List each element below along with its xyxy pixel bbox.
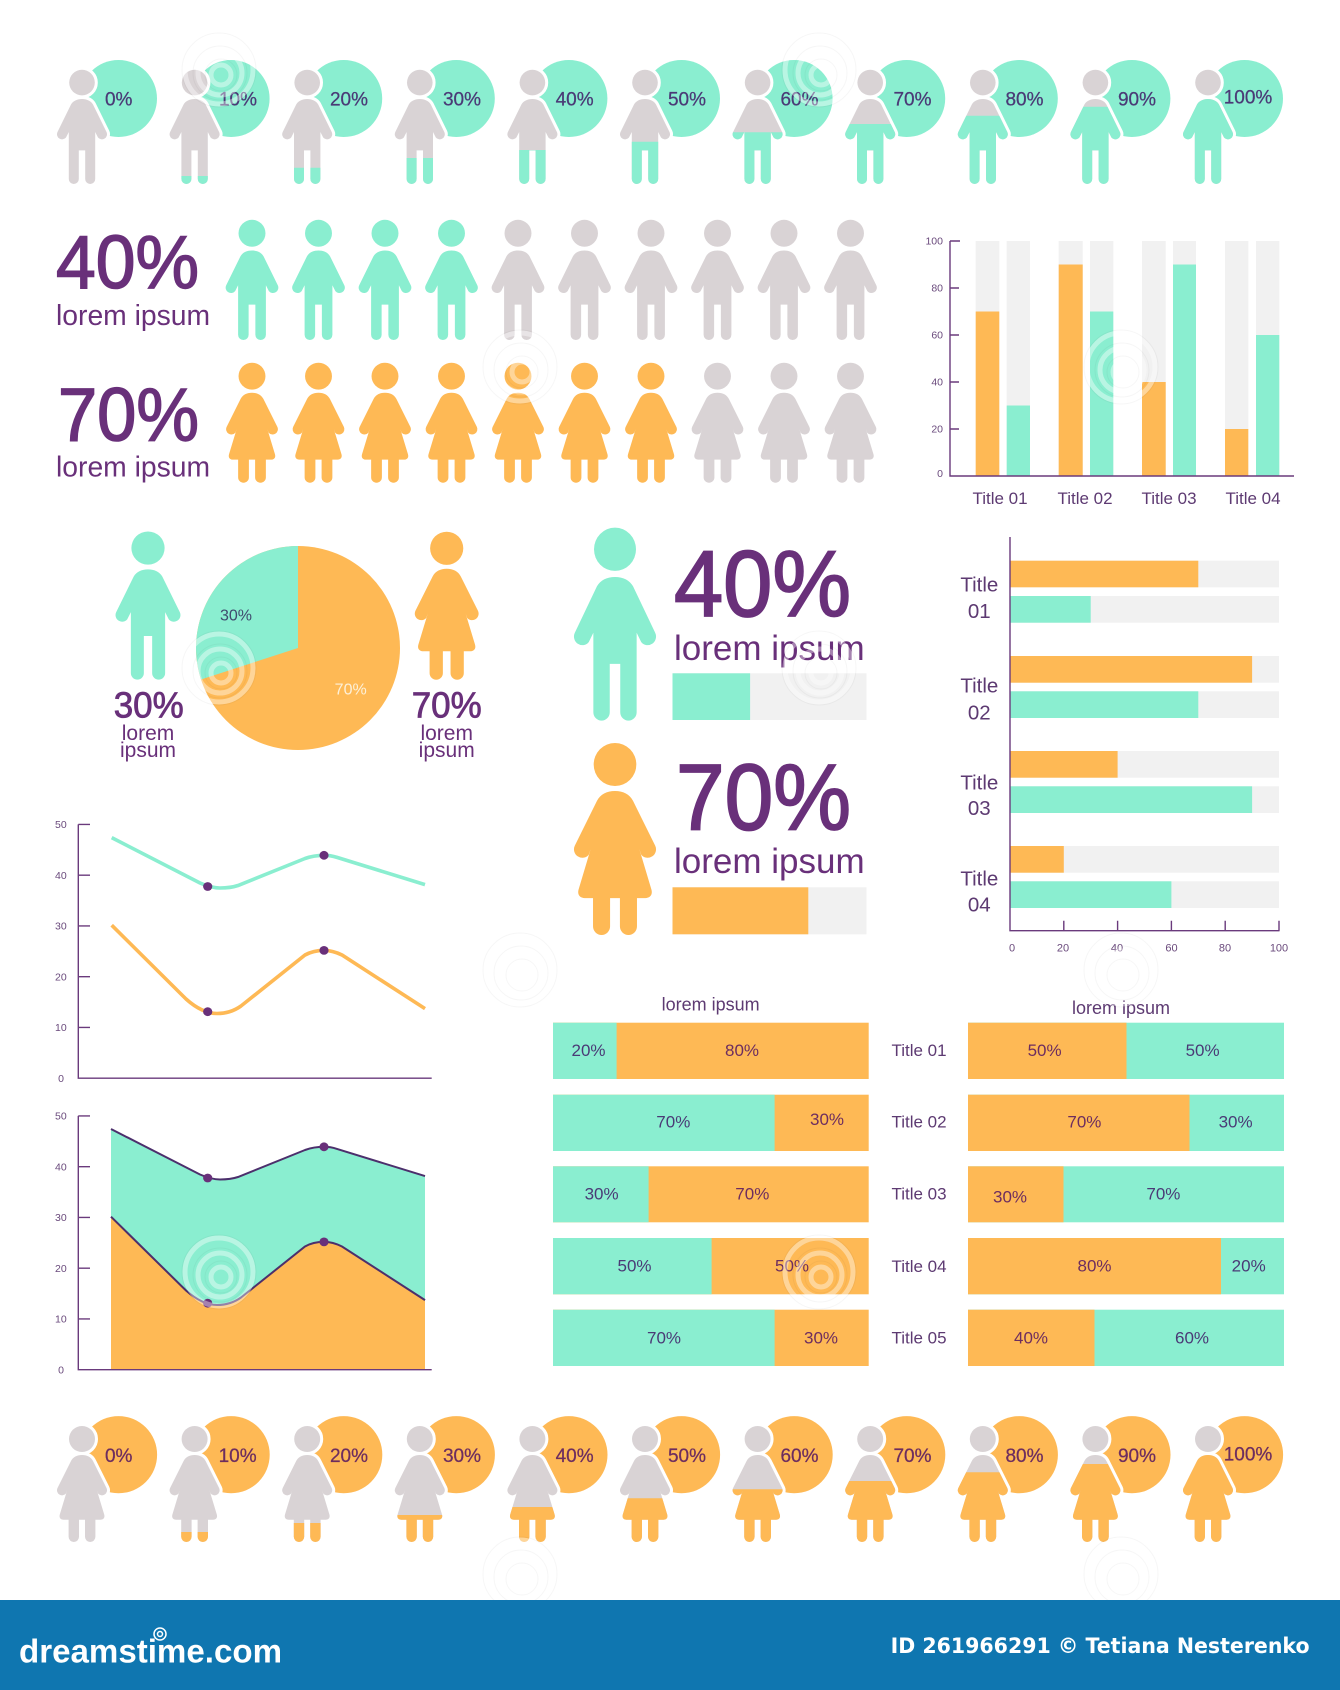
chart: area chart: 40	[55, 1162, 67, 1174]
icon: man 30%: 30%	[443, 89, 481, 110]
stacked bars: right column	[968, 998, 1284, 1366]
text: 70% lorem ipsum: ipsum	[419, 739, 475, 762]
icon: man 30%	[395, 60, 495, 184]
icon: woman 10%: 10%	[219, 1446, 257, 1467]
icon: man 70%	[845, 60, 945, 184]
chart: vertical column chart: 60	[931, 330, 943, 342]
row titles: Title 05	[891, 1329, 947, 1348]
stat panel: 70% woman with progress bar: lorem ipsum	[674, 842, 865, 881]
icon: woman 30%: 30%	[443, 1446, 481, 1467]
stacked bars: left column: 50%	[775, 1257, 809, 1276]
stat panel: 40% man with progress bar: 40%	[674, 531, 851, 636]
icon: man 20%: 20%	[330, 89, 368, 110]
icon: man 50%: 50%	[668, 89, 706, 110]
icon: man 10%	[170, 60, 270, 184]
icon: woman 40%: 40%	[556, 1446, 594, 1467]
text: 70% lorem ipsum	[412, 685, 482, 762]
icon: woman 100%: 100%	[1224, 1444, 1272, 1465]
pictogram row: 7 of 10 women	[226, 363, 876, 483]
chart: horizontal bar chart: 04	[968, 894, 991, 917]
stacked bars: right column: 70%	[1146, 1185, 1180, 1204]
chart: line chart: 20	[55, 972, 67, 984]
stat: 70% lorem ipsum: lorem ipsum	[56, 451, 210, 483]
icon: man 90%	[1070, 60, 1170, 184]
icon: woman 30%	[395, 1416, 495, 1542]
stacked bars: right column: 20%	[1232, 1257, 1266, 1276]
icon: man 40%: 40%	[556, 89, 594, 110]
chart: horizontal bar chart: 03	[968, 797, 991, 820]
icon: woman 60%	[733, 1416, 833, 1542]
chart: vertical column chart: 80	[931, 282, 943, 294]
icon: woman 20%: 20%	[330, 1446, 368, 1467]
icon: man 0%: 0%	[105, 89, 133, 110]
pictogram row: 4 of 10 men	[226, 220, 877, 340]
stacked bars: left column: 30%	[585, 1185, 619, 1204]
icon: man 80%	[958, 60, 1058, 184]
icon: man	[116, 531, 180, 680]
pie chart: 70%	[335, 682, 367, 698]
stacked bars: left column: 70%	[647, 1328, 681, 1347]
icon: woman 100%	[1183, 1416, 1283, 1542]
icon: woman 70%	[845, 1416, 945, 1542]
stat: 70% lorem ipsum: 70%	[58, 373, 199, 457]
stat panel: 40% man with progress bar	[574, 528, 866, 721]
chart: vertical column chart: 0	[937, 468, 943, 480]
icon: woman 40%	[507, 1416, 608, 1542]
icon: man 0%	[57, 60, 157, 184]
row titles	[891, 1041, 947, 1348]
icon: woman 70%: 70%	[893, 1446, 932, 1467]
chart: vertical column chart: 40	[931, 376, 943, 388]
stacked bars: left column: 70%	[735, 1185, 769, 1204]
icon: man 10%: 10%	[219, 89, 257, 110]
chart: horizontal bar chart: Title	[960, 675, 998, 698]
row titles: Title 03	[891, 1185, 947, 1204]
icon: man 70%: 70%	[893, 89, 932, 110]
icon: man 40%	[507, 60, 607, 184]
text: 30% lorem ipsum: lorem	[122, 722, 174, 745]
text: 70% lorem ipsum: lorem	[420, 722, 473, 745]
chart: horizontal bar chart: Title	[960, 574, 998, 597]
stacked bars: right column: 40%	[1014, 1328, 1048, 1347]
stacked bars: right column: lorem ipsum	[1072, 998, 1170, 1018]
pie chart	[196, 546, 400, 750]
chart: area chart: 50	[55, 1111, 67, 1123]
stat panel: 40% man with progress bar: lorem ipsum	[674, 629, 865, 668]
chart: area chart: 20	[55, 1263, 67, 1275]
chart: vertical column chart: Title 03	[1141, 489, 1197, 508]
logo spiral icon	[154, 1628, 166, 1640]
chart: horizontal bar chart: 01	[968, 600, 991, 623]
chart: vertical column chart	[925, 236, 1294, 508]
icon: woman 0%: 0%	[105, 1446, 133, 1467]
row titles: Title 04	[891, 1257, 947, 1276]
chart: horizontal bar chart: Title	[960, 771, 998, 794]
footer credit: ID 261966291 © Tetiana Nesterenko	[891, 1634, 1310, 1658]
chart: line chart	[55, 819, 432, 1085]
chart: area chart: 0	[58, 1364, 64, 1376]
icon: woman 50%	[620, 1416, 720, 1542]
icon: man 20%	[282, 60, 382, 184]
chart: line chart: 0	[58, 1073, 64, 1085]
stacked bars: left column: 50%	[617, 1257, 652, 1276]
stacked bars: right column: 80%	[1077, 1257, 1112, 1276]
stacked bars: right column: 60%	[1175, 1328, 1209, 1347]
icon: man 90%: 90%	[1118, 89, 1156, 110]
stat panel: 70% woman with progress bar	[574, 743, 866, 935]
stacked bars: right column: 30%	[993, 1188, 1027, 1207]
chart: horizontal bar chart: 40	[1111, 943, 1123, 955]
chart: horizontal bar chart: 100	[1270, 943, 1288, 955]
stat: 40% lorem ipsum: 40%	[56, 220, 199, 304]
chart: line chart: 30	[55, 921, 67, 933]
icon: woman 60%: 60%	[780, 1446, 819, 1467]
chart: vertical column chart: Title 02	[1057, 489, 1113, 508]
chart: area chart	[55, 1111, 432, 1376]
stacked bars: left column: 70%	[656, 1113, 690, 1132]
stacked bars: left column	[553, 995, 869, 1366]
chart: horizontal bar chart: 20	[1057, 943, 1069, 955]
stacked bars: left column: 20%	[571, 1041, 606, 1060]
icon: woman 90%: 90%	[1118, 1446, 1156, 1467]
icon: man 60%: 60%	[780, 89, 819, 110]
chart: horizontal bar chart: Title	[960, 868, 998, 891]
chart: vertical column chart: Title 01	[972, 489, 1028, 508]
icon row: women percentage scale	[57, 1416, 1283, 1542]
stat: 40% lorem ipsum: lorem ipsum	[56, 299, 210, 331]
stacked bars: right column: 50%	[1028, 1041, 1062, 1060]
icon: man 80%: 80%	[1005, 89, 1044, 110]
stacked bars: left column: 30%	[810, 1110, 844, 1129]
icon: woman 90%	[1070, 1416, 1170, 1542]
chart: horizontal bar chart: 0	[1009, 943, 1015, 955]
chart: line chart: 40	[55, 870, 67, 882]
icon: woman	[415, 532, 479, 680]
chart: area chart: 10	[55, 1314, 67, 1326]
footer bar	[0, 1600, 1340, 1690]
footer logo text: dreamstime.com	[19, 1633, 282, 1670]
chart: horizontal bar chart: 02	[968, 701, 991, 724]
chart: horizontal bar chart: 80	[1219, 943, 1231, 955]
stacked bars: left column: lorem ipsum	[662, 995, 760, 1015]
icon: woman 20%	[282, 1416, 382, 1542]
stacked bars: right column: 30%	[1219, 1113, 1253, 1132]
icon: woman 80%: 80%	[1005, 1446, 1044, 1467]
pie panel: gender split	[114, 531, 482, 762]
text: 30% lorem ipsum: 30%	[114, 685, 184, 726]
pie chart: 30%	[220, 608, 252, 624]
text: 30% lorem ipsum: ipsum	[120, 739, 176, 762]
chart: vertical column chart: Title 04	[1225, 489, 1281, 508]
stacked bars: right column: 50%	[1186, 1041, 1220, 1060]
chart: horizontal bar chart	[960, 537, 1288, 955]
chart: line chart: 10	[55, 1022, 67, 1034]
row titles: Title 01	[891, 1041, 947, 1060]
icon: woman 10%	[170, 1416, 270, 1542]
row titles: Title 02	[891, 1113, 947, 1132]
icon: woman 80%	[958, 1416, 1058, 1542]
stacked bars: right column: 70%	[1067, 1113, 1101, 1132]
text: 30% lorem ipsum	[114, 685, 184, 762]
chart: vertical column chart: 20	[931, 424, 943, 436]
chart: line chart: 50	[55, 819, 67, 831]
stacked bars: left column: 30%	[804, 1328, 838, 1347]
chart: vertical column chart: 100	[925, 236, 943, 248]
icon: man 60%	[733, 60, 833, 184]
icon: man 100%	[1183, 60, 1283, 184]
icon: man 50%	[620, 60, 720, 184]
chart: area chart: 30	[55, 1212, 67, 1224]
stat panel: 70% woman with progress bar: 70%	[676, 744, 851, 849]
text: 70% lorem ipsum: 70%	[412, 685, 482, 726]
icon: man 100%: 100%	[1224, 88, 1272, 109]
stacked bars: left column: 80%	[725, 1041, 759, 1060]
icon: woman 50%: 50%	[668, 1446, 706, 1467]
chart: horizontal bar chart: 60	[1165, 943, 1178, 955]
icon row: men percentage scale	[57, 60, 1283, 184]
icon: woman 0%	[57, 1416, 157, 1542]
